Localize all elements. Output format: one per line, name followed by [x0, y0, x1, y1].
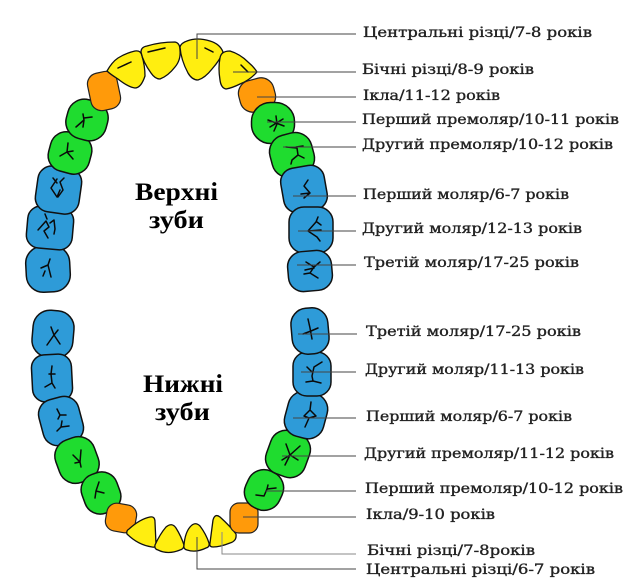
upper teeth arch: [25, 39, 334, 293]
lower left central incisor: [155, 525, 184, 552]
upper teeth labels: Третій моляр/17-25 років: [364, 255, 579, 271]
upper right first premolar: [252, 102, 294, 144]
lower right second premolar: [261, 426, 315, 482]
lower right central incisor: [184, 524, 209, 551]
lower left second premolar: [50, 432, 104, 488]
lower teeth labels: Другий премоляр/11-12 років: [364, 446, 614, 462]
heading: upper teeth: [135, 179, 218, 234]
heading: lower teeth: зуби: [155, 399, 210, 426]
lower teeth arch: [31, 306, 331, 552]
upper teeth labels: Бічні різці/8-9 років: [362, 62, 534, 78]
upper right second molar: [289, 207, 333, 253]
lower left lateral incisor: [127, 517, 156, 547]
heading: upper teeth: зуби: [149, 207, 204, 234]
upper left first molar: [34, 164, 83, 216]
upper left second molar: [25, 205, 75, 251]
lower teeth labels: [364, 324, 623, 578]
lower left second molar: [31, 353, 73, 403]
upper teeth labels: Перший премоляр/10-11 років: [362, 112, 619, 128]
upper teeth labels: Другий моляр/12-13 років: [362, 221, 582, 237]
upper right canine: [235, 75, 279, 115]
lower teeth labels: Центральні різці/6-7 років: [366, 562, 595, 578]
lower right third molar: [290, 306, 330, 356]
upper teeth labels: Перший моляр/6-7 років: [363, 187, 569, 203]
heading: lower teeth: Нижні: [143, 371, 223, 398]
upper left canine: [85, 69, 123, 113]
lower left first molar: [35, 393, 87, 449]
upper right lateral incisor: [219, 51, 257, 89]
lower right first premolar: [239, 464, 289, 516]
upper left lateral incisor: [107, 51, 145, 88]
heading: lower teeth: [143, 371, 223, 426]
upper teeth labels: [362, 25, 619, 271]
lower right second molar: [293, 352, 331, 396]
lower left first premolar: [77, 467, 125, 519]
lower right lateral incisor: [210, 516, 236, 547]
leader lines: [197, 34, 357, 569]
lower teeth labels: Перший премоляр/10-12 років: [365, 481, 623, 497]
lower right canine: [230, 503, 258, 533]
lower left canine: [104, 502, 138, 534]
lower teeth labels: Перший моляр/6-7 років: [366, 409, 572, 425]
lower teeth labels: Бічні різці/7-8років: [367, 543, 535, 559]
lower left third molar: [31, 309, 75, 359]
heading: upper teeth: Верхні: [135, 179, 218, 206]
upper teeth labels: Другий премоляр/10-12 років: [362, 137, 613, 153]
upper left central incisor: [141, 42, 180, 79]
lower teeth labels: Ікла/9-10 років: [366, 507, 495, 523]
upper right second premolar: [266, 129, 318, 181]
upper left third molar: [25, 245, 71, 293]
upper right third molar: [286, 249, 334, 293]
upper left first premolar: [62, 95, 112, 145]
upper left second premolar: [45, 128, 95, 178]
lower right first molar: [281, 388, 331, 442]
upper right central incisor: [180, 39, 223, 80]
upper right first molar: [278, 163, 330, 215]
upper teeth labels: Центральні різці/7-8 років: [363, 25, 592, 41]
upper teeth labels: Ікла/11-12 років: [363, 88, 500, 104]
lower teeth labels: Другий моляр/11-13 років: [365, 362, 584, 378]
lower teeth labels: Третій моляр/17-25 років: [366, 324, 581, 340]
